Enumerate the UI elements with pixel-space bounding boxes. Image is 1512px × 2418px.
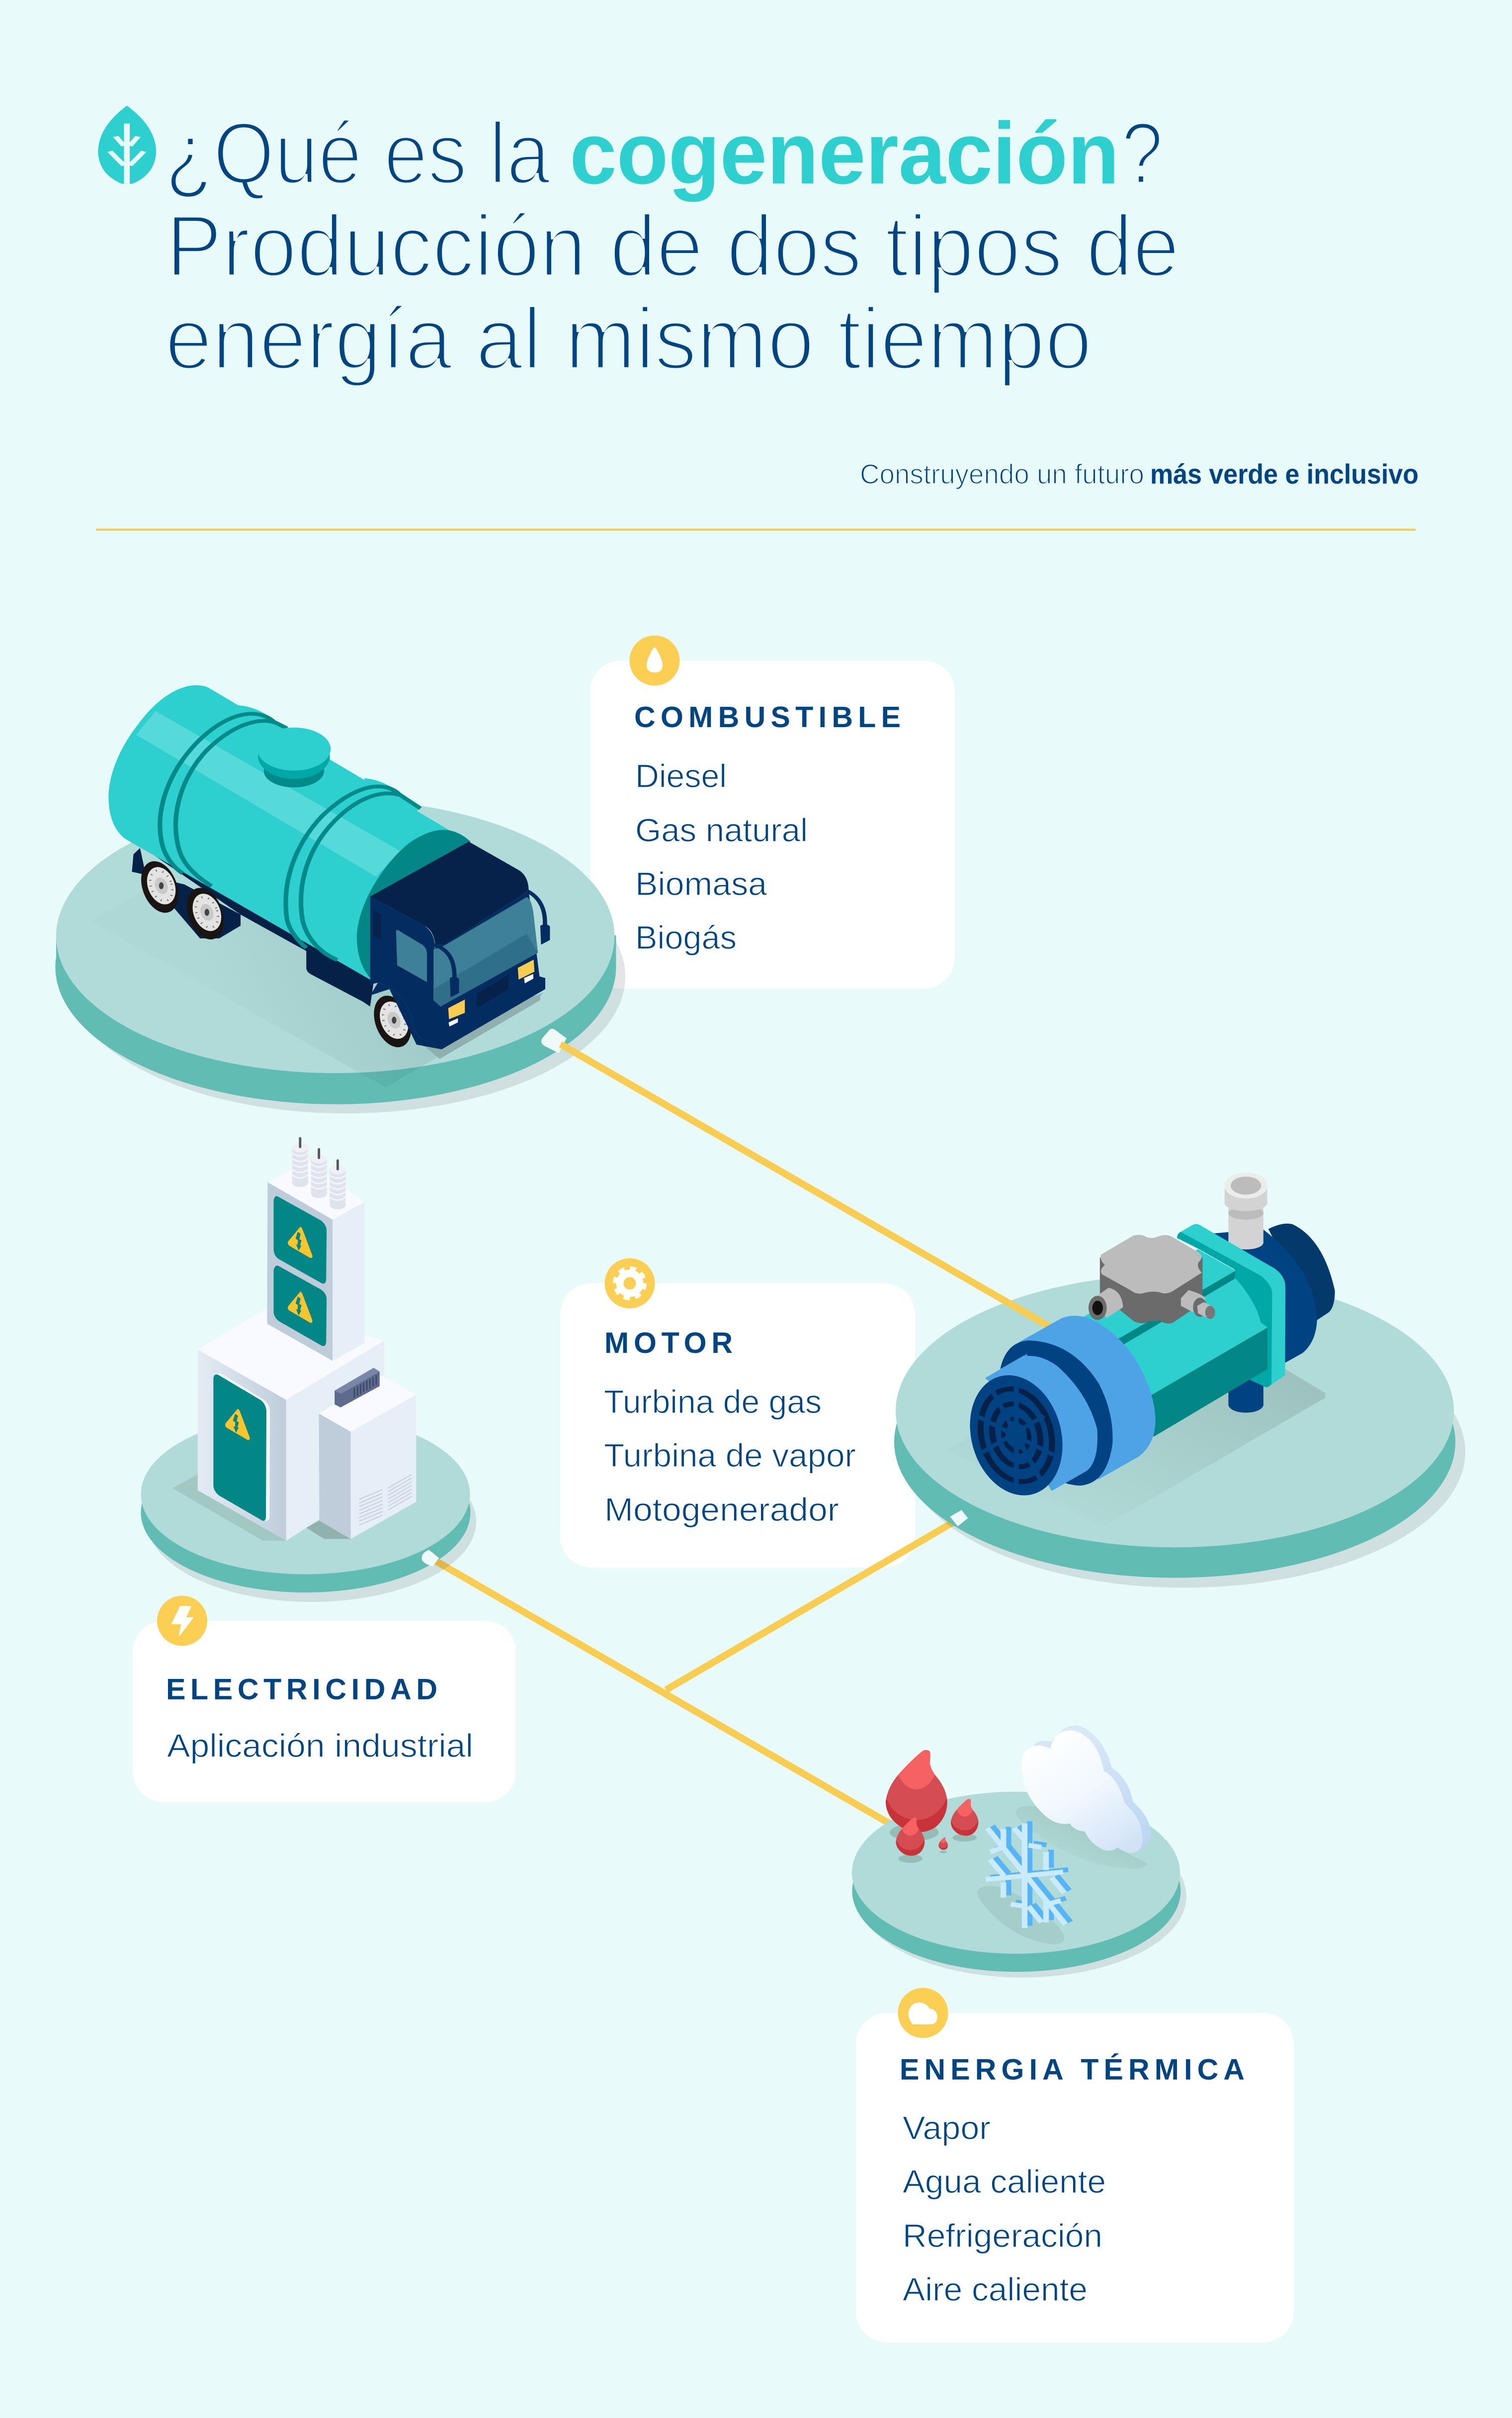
heading: electricidad: ELECTRICIDAD	[166, 1673, 437, 1706]
cloud shadow	[1016, 1806, 1147, 1869]
red water drops	[884, 1732, 979, 1856]
panel: combustible	[590, 635, 955, 989]
heading: motor: MOTOR	[604, 1327, 733, 1359]
icon: lightning badge	[157, 1595, 207, 1646]
icon: fuel drop badge	[629, 635, 680, 686]
title: energía al mismo tiempo	[165, 290, 1092, 388]
tank front	[357, 830, 471, 978]
title	[165, 105, 1179, 388]
heading: energia termica: ENERGIA TÉRMICA	[900, 2053, 1245, 2086]
tank bands	[160, 714, 420, 960]
main cabinet	[198, 1309, 384, 1541]
tower cabinet	[267, 1161, 364, 1361]
chassis	[132, 848, 374, 1006]
tank highlight	[136, 711, 400, 877]
vent box	[335, 1368, 380, 1408]
list: combustibles: Biomasa	[635, 865, 767, 902]
snowflake	[986, 1821, 1071, 1928]
connector plug: truck	[541, 1029, 567, 1053]
front grille	[960, 1370, 1073, 1501]
icon: leaf	[98, 106, 156, 184]
panel: energia termica	[856, 1988, 1294, 2342]
connector: truck to motor	[561, 1044, 1056, 1331]
truck	[108, 685, 550, 1059]
list: motores: Turbina de vapor	[604, 1437, 856, 1474]
list: energia termica: Refrigeración	[903, 2217, 1102, 2254]
connector plug: motor	[950, 1510, 968, 1526]
title: ?	[1121, 105, 1163, 202]
flange	[1177, 1224, 1285, 1387]
list: combustibles: Biogás	[635, 919, 737, 956]
junction box	[1089, 1235, 1215, 1324]
drop shadows	[890, 1824, 977, 1863]
motor body	[1082, 1249, 1267, 1437]
tank band fill	[239, 705, 420, 815]
title: cogeneración	[570, 105, 1119, 202]
motor rear body	[1213, 1229, 1317, 1363]
panel: electricidad	[133, 1595, 516, 1802]
heading: combustible: COMBUSTIBLE	[634, 701, 901, 734]
list: motores: Motogenerador	[604, 1491, 839, 1528]
side cabinet	[319, 1375, 416, 1539]
upper pipe	[1224, 1172, 1267, 1250]
title: Producción de dos tipos de	[166, 198, 1179, 295]
electricity scene	[141, 1137, 476, 1602]
thermal scene	[852, 1726, 1186, 1978]
list: combustibles	[635, 757, 808, 956]
tank cap	[257, 728, 331, 787]
platform: electricity	[141, 1414, 476, 1602]
connector: motor to junction	[666, 1522, 954, 1690]
icon: cloud badge	[898, 1988, 948, 2038]
tank	[108, 685, 469, 980]
list: energia termica: Vapor	[903, 2109, 991, 2146]
list: energia termica: Agua caliente	[903, 2163, 1106, 2200]
bell housing	[985, 1316, 1156, 1491]
snowflake shadow	[977, 1886, 1064, 1944]
connector: electricidad to thermal	[433, 1560, 895, 1827]
panel: motor	[560, 1258, 915, 1568]
list: combustibles: Diesel	[635, 757, 727, 794]
platform: thermal	[852, 1792, 1186, 1978]
title: ¿Qué es la	[165, 105, 550, 202]
subtitle	[860, 458, 1419, 490]
lower pipe	[1228, 1378, 1263, 1413]
icon: gear badge	[604, 1258, 655, 1308]
cab	[370, 841, 550, 1059]
motor	[960, 1172, 1335, 1501]
truck scene	[55, 685, 625, 1113]
list: motores	[604, 1383, 856, 1528]
insulators	[292, 1137, 345, 1209]
list: motores: Turbina de gas	[604, 1383, 822, 1420]
subtitle: más verde e inclusivo	[1150, 458, 1419, 490]
cloud	[1022, 1726, 1151, 1853]
divider	[96, 529, 1416, 531]
subtitle: Construyendo un futuro	[860, 458, 1144, 490]
list: energia termica	[903, 2109, 1106, 2308]
wheels	[135, 858, 417, 1050]
text: aplicacion industrial: Aplicación industrial	[167, 1727, 473, 1764]
list: combustibles: Gas natural	[635, 812, 808, 848]
platform: truck	[55, 799, 625, 1113]
list: energia termica: Aire caliente	[903, 2271, 1088, 2308]
connector plug: electricity	[422, 1550, 439, 1566]
back disc	[1268, 1224, 1335, 1321]
motor platform	[894, 1274, 1465, 1587]
